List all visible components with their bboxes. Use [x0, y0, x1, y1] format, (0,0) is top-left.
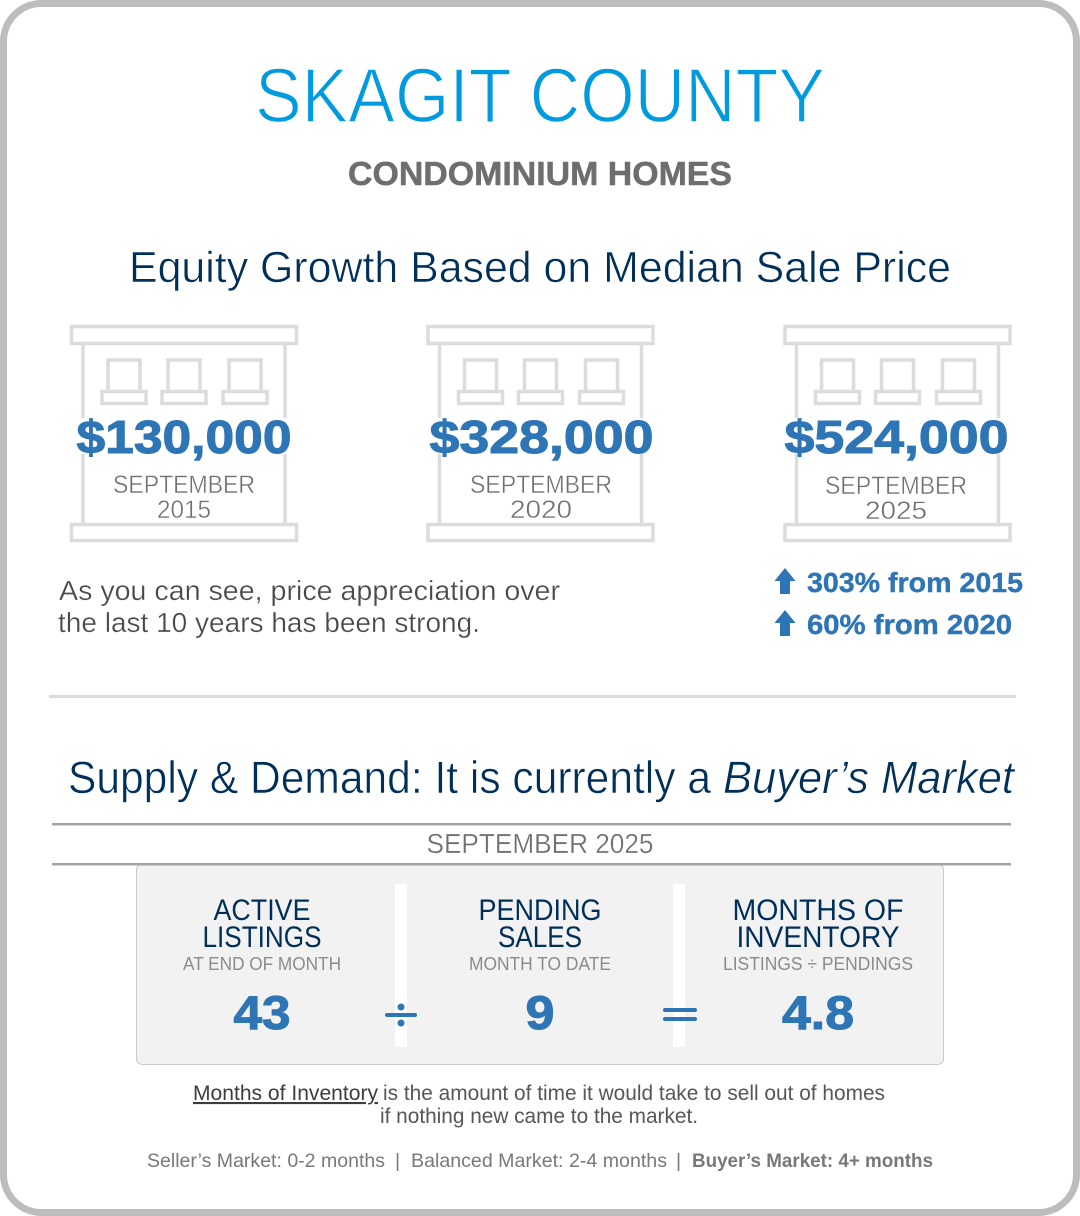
icon: condo building 2025 — [785, 326, 1010, 540]
legend: market types: Balanced Market: 2-4 months — [411, 1150, 667, 1172]
heading: supply and demand: Buyer’s Market — [723, 752, 1016, 803]
text: months of inventory definition — [193, 1082, 885, 1128]
pending sales: MONTH TO DATE — [469, 954, 611, 974]
pending sales: PENDING — [478, 894, 602, 927]
panel: 2025 price — [784, 326, 1010, 540]
panel: 2020 price — [428, 326, 654, 540]
active listings: AT END OF MONTH — [183, 954, 341, 974]
legend: market types: Seller’s Market: 0-2 months — [147, 1150, 385, 1172]
date 2015: SEPTEMBER — [113, 471, 255, 499]
legend: market types: | — [676, 1150, 681, 1172]
icon: equals — [663, 1008, 697, 1021]
date 2025: 2025 — [865, 497, 927, 525]
title: SKAGIT COUNTY — [255, 53, 825, 139]
date 2020: 2020 — [510, 496, 572, 524]
text: months of inventory definition: if nothing new came to the market. — [380, 1105, 698, 1128]
icon: up arrow — [774, 568, 796, 594]
panel: months of inventory — [52, 863, 1011, 1064]
price 2025: $524,000 — [784, 411, 1008, 463]
text: price appreciation note: the last 10 years has been strong. — [58, 607, 480, 638]
icon: condo building 2015 — [72, 326, 296, 540]
date label: SEPTEMBER 2025 — [426, 828, 654, 859]
heading: equity growth: Equity Growth Based on Median Sale Price — [129, 243, 951, 292]
active listings: LISTINGS — [202, 921, 322, 954]
date 2020: SEPTEMBER — [470, 471, 612, 499]
subtitle: CONDOMINIUM HOMES — [348, 155, 732, 192]
date 2025: SEPTEMBER — [825, 472, 967, 500]
callout: growth since 2015: 303% from 2015 — [807, 567, 1023, 598]
text: price appreciation note: As you can see, price appreciation over — [59, 575, 560, 606]
legend: market types — [147, 1150, 933, 1172]
legend: market types: Buyer’s Market: 4+ months — [692, 1150, 933, 1172]
price 2015: $130,000 — [76, 411, 292, 463]
months of inventory column: MONTHS OF — [732, 894, 904, 927]
panel: 2015 price — [72, 326, 296, 540]
price 2020: $328,000 — [430, 411, 654, 463]
months of inventory column: INVENTORY — [736, 921, 900, 954]
active listings — [183, 894, 341, 1039]
months of inventory column: 4.8 — [782, 986, 854, 1039]
icon: divide — [385, 1004, 417, 1026]
date 2015: 2015 — [157, 496, 211, 524]
legend: market types: | — [395, 1150, 400, 1172]
months of inventory column: LISTINGS ÷ PENDINGS — [723, 954, 913, 974]
icon: up arrow — [774, 610, 796, 636]
pending sales: SALES — [498, 921, 582, 954]
heading: supply and demand: Supply & Demand: It is currently a — [68, 752, 712, 803]
months of inventory column — [723, 894, 913, 1039]
pending sales — [469, 894, 611, 1039]
active listings: ACTIVE — [214, 894, 310, 927]
active listings: 43 — [234, 986, 290, 1039]
icon: condo building 2020 — [428, 326, 653, 540]
text: months of inventory definition: is the amount of time it would take to sell out of homes — [383, 1082, 885, 1105]
text: months of inventory definition: Months of Inventory — [193, 1082, 378, 1105]
pending sales: 9 — [526, 986, 554, 1039]
callout: growth since 2020: 60% from 2020 — [807, 609, 1012, 640]
